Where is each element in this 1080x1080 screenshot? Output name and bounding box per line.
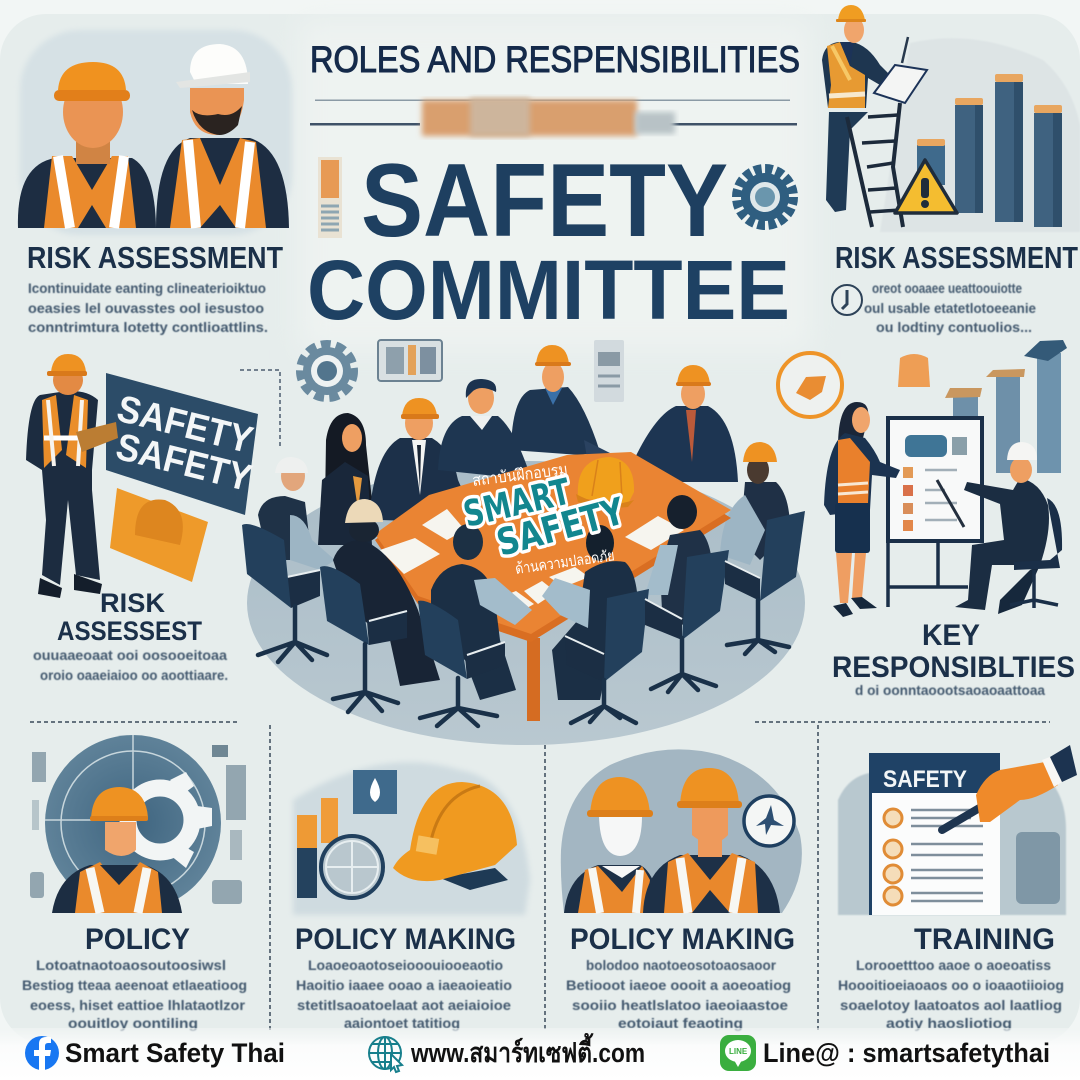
person: right orange hat bbox=[720, 442, 790, 565]
panel: policy making right bbox=[561, 749, 802, 1031]
icon: gear with centre bbox=[302, 346, 352, 396]
grey backdrop bbox=[561, 749, 802, 913]
illustration: woman presenting bbox=[824, 402, 900, 617]
chair E bbox=[645, 550, 729, 692]
icon: small control panel bbox=[378, 340, 442, 381]
decorative small icons bbox=[30, 745, 246, 904]
body text: stetitlsaoatoelaat aot aeiaioioe bbox=[297, 998, 512, 1013]
title divider with orange smudge bbox=[310, 98, 797, 136]
illustration: ladder bbox=[847, 103, 903, 227]
body text: oroio oaaeiaioo oo aoottiaare. bbox=[40, 668, 228, 683]
body text: Haoitio iaaee ooao a iaeaoieatio bbox=[296, 978, 512, 993]
body text: eoess, hiset eattioe lhlataotlzor bbox=[30, 998, 246, 1013]
person: red tie bbox=[633, 365, 738, 482]
panel: top-right risk assessment bbox=[822, 5, 1078, 335]
logo: thai bottom line: ด้านความปลอดภัย bbox=[514, 547, 616, 578]
body text: Betiooot iaeoe oooit a aoeoatiog bbox=[566, 978, 791, 993]
person: beige hat bbox=[333, 499, 440, 686]
person: suit orange hat bbox=[371, 398, 472, 522]
body text bbox=[864, 281, 1036, 335]
body text: soaelotoy laatoatos aol laatliog bbox=[840, 998, 1062, 1013]
icon: warning triangle bbox=[895, 160, 957, 213]
illustration: worker with clipboard bbox=[26, 354, 118, 598]
body text: ou lodtiny contuolios... bbox=[876, 320, 1032, 335]
illustration: worker with clipboard bbox=[822, 5, 927, 212]
heading: POLICY bbox=[85, 923, 190, 956]
body text: oouitloy oontiling bbox=[68, 1016, 198, 1031]
chart: central meeting scene bbox=[242, 345, 805, 745]
chair A bbox=[242, 524, 327, 662]
safety sign: SAFETY bbox=[112, 426, 256, 500]
bars with arrow bbox=[945, 340, 1067, 473]
body text: sooiio heatlslatoo iaeoiaastoe bbox=[572, 998, 789, 1013]
panel: policy making left bbox=[295, 770, 517, 1031]
panel: left risk assessment bbox=[26, 354, 258, 683]
body text: Bestiog tteaa aeenoat etlaeatioog bbox=[22, 978, 247, 993]
body text: oeasies lel ouvasstes ool iesustoo bbox=[28, 301, 264, 316]
body text: bolodoo naotoeosotoaosaoor bbox=[586, 958, 777, 973]
illustration: worker with gear bbox=[45, 735, 221, 913]
illustration: orange helmet bbox=[393, 782, 517, 890]
icon: small device sketch bbox=[594, 340, 624, 402]
icon: line: LINE bbox=[729, 1047, 748, 1056]
seated people at the back bbox=[258, 345, 790, 570]
title: ROLES AND RESPENSIBILITIES bbox=[310, 39, 800, 80]
icon: facebook bbox=[25, 1036, 59, 1070]
heading: KEY bbox=[922, 619, 980, 652]
website label: www.สมาร์ทเซฟตี้.com bbox=[410, 1032, 645, 1068]
body text bbox=[566, 958, 791, 1031]
chair D bbox=[565, 589, 649, 723]
body text: Hoooitioeiaoaos oo o ioaaotiioiog bbox=[838, 978, 1064, 993]
icon: clock circle bbox=[744, 796, 794, 846]
dashed corner line bbox=[240, 370, 280, 447]
decorative device bbox=[1016, 832, 1060, 904]
body text: Icontinuidate eanting clineaterioiktuo bbox=[28, 281, 266, 296]
icon: circle magnifier bbox=[832, 285, 862, 315]
orange helmet card bbox=[110, 488, 208, 582]
body text bbox=[28, 281, 268, 335]
heading bbox=[832, 619, 1075, 684]
heading: TRAINING bbox=[914, 923, 1055, 956]
panel: right key responsibilities bbox=[778, 340, 1075, 698]
panel: policy bbox=[22, 735, 247, 1031]
laptop bbox=[584, 440, 636, 500]
heading: RISK bbox=[100, 588, 165, 618]
heading: safety: SAFETY bbox=[361, 143, 728, 259]
facebook label: Smart Safety Thai bbox=[65, 1038, 285, 1068]
body text: eotoiaut feaoting bbox=[618, 1016, 743, 1031]
body text: Lorooetttoo aaoe o aoeoatiss bbox=[856, 958, 1051, 973]
illustration: hand with pen bbox=[942, 745, 1077, 830]
safety sign bbox=[106, 373, 258, 515]
panel: top-left risk assessment bbox=[18, 44, 289, 335]
logo helmet bbox=[576, 457, 634, 508]
illustration: seated man with white hat bbox=[955, 442, 1062, 614]
papers bbox=[380, 509, 684, 616]
panel: training bbox=[838, 745, 1077, 1031]
presentation board bbox=[888, 418, 982, 607]
body text: oreot ooaaee ueattoouiotte bbox=[872, 281, 1022, 296]
heading bbox=[57, 588, 202, 646]
chair B bbox=[320, 566, 407, 712]
logo: smart safety bbox=[460, 457, 634, 578]
person: white hat bbox=[258, 457, 335, 570]
illustration: safety document bbox=[869, 753, 1000, 915]
person: woman bbox=[318, 413, 372, 545]
body text: aaiontoet tatitiog bbox=[344, 1016, 460, 1031]
person: dark hair bbox=[438, 379, 530, 478]
body text bbox=[296, 958, 512, 1031]
illustration: bar chart bbox=[917, 74, 1062, 227]
floor ellipse bbox=[247, 461, 805, 745]
small orange box bbox=[898, 354, 930, 387]
line label: Line@ : smartsafetythai bbox=[763, 1038, 1050, 1068]
body text bbox=[33, 648, 228, 683]
panel dividers bbox=[30, 722, 1050, 1030]
heading: RISK ASSESSMENT bbox=[27, 240, 283, 275]
body text bbox=[838, 958, 1064, 1031]
icon: gear bbox=[739, 171, 791, 223]
logo: thai top line: สถาบันฝึกอบรม bbox=[471, 461, 569, 490]
illustration: two safety workers bbox=[18, 44, 289, 228]
body text: Lotoatnaotoaosoutoosiwsl bbox=[36, 958, 226, 973]
person: dark back two bbox=[542, 525, 638, 700]
chair F bbox=[725, 511, 805, 654]
body text: d oi oonntaoootsaoaoaattoaa bbox=[855, 683, 1045, 698]
icon: striped bookmark bbox=[318, 157, 342, 238]
body text: oul usable etatetlotoeeanie bbox=[864, 301, 1036, 316]
body text bbox=[22, 958, 247, 1031]
person: dark back one bbox=[431, 524, 532, 700]
icon: orange ring with helmet bbox=[778, 353, 842, 417]
heading: ASSESSEST bbox=[57, 616, 202, 646]
logo: safety: SAFETY bbox=[492, 489, 630, 565]
body text: aotiy haosliotiog bbox=[886, 1016, 1012, 1031]
conference table bbox=[375, 452, 731, 721]
icon: line bbox=[720, 1035, 756, 1071]
icon: globe bbox=[369, 1037, 402, 1072]
person: dark back three bbox=[645, 495, 712, 630]
illustration: safety document: SAFETY bbox=[883, 766, 967, 793]
heading: committee: COMMITTEE bbox=[307, 243, 790, 337]
heading: POLICY MAKING bbox=[570, 923, 795, 956]
body text: ouuaaeoaat ooi oosooeitoaa bbox=[33, 648, 228, 663]
logo: smart: SMART bbox=[460, 471, 575, 536]
body text: Loaoeoaotoseiooouiooeaotio bbox=[308, 958, 503, 973]
person: centre orange hat bbox=[511, 345, 600, 455]
chair C bbox=[418, 601, 505, 726]
footer bar bbox=[0, 1028, 1080, 1080]
illustration: blocks and valve bbox=[297, 770, 397, 898]
illustration: two workers bbox=[564, 768, 780, 913]
seated people in front bbox=[333, 495, 712, 700]
body text: conntrimtura lotetty contlioattlins. bbox=[28, 320, 268, 335]
heading: POLICY MAKING bbox=[295, 923, 516, 956]
safety sign: SAFETY bbox=[113, 388, 257, 462]
